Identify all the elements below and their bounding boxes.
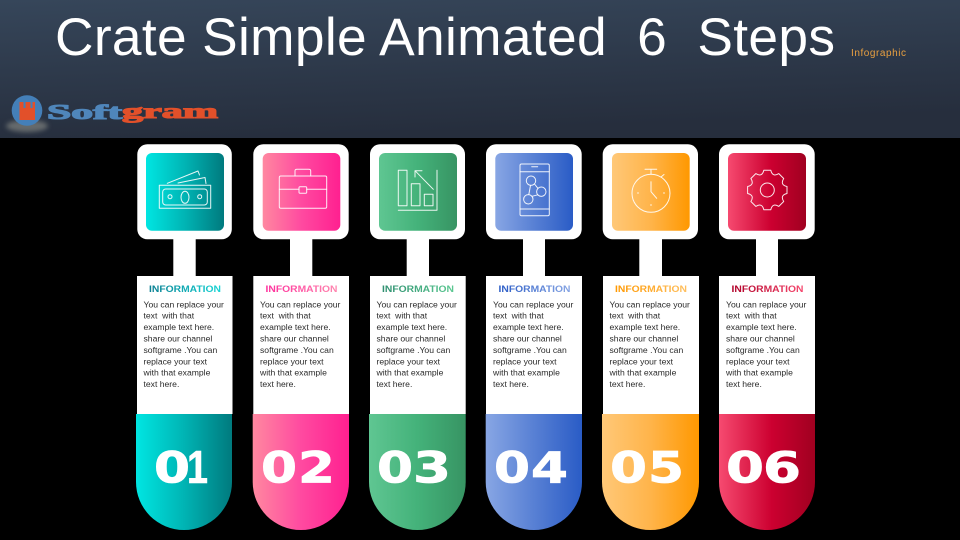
- step 6 panel: [719, 144, 815, 530]
- step 4 text body: replace your text: [493, 356, 557, 366]
- step 4 text body: with that example: [492, 368, 560, 378]
- step 2 text body: example text here.: [260, 322, 331, 332]
- step 5 text body: text with that: [610, 311, 661, 321]
- step 6 text body: share our channel: [726, 334, 795, 344]
- step 6 text body: text here.: [726, 379, 762, 389]
- step 3 text body: replace your text: [376, 356, 441, 366]
- step 4 text body: share our channel: [493, 334, 562, 344]
- step 2 text body: You can replace your: [260, 299, 341, 309]
- step 1 text body: share our channel: [144, 334, 212, 344]
- step 5 text body: You can replace your: [610, 299, 690, 309]
- step 3 text body: with that example: [376, 368, 444, 378]
- step 2 text body: with that example: [259, 368, 327, 378]
- step 2 text body: share our channel: [260, 334, 329, 344]
- icon: briefcase: [263, 153, 340, 231]
- step 1 text body: [137, 276, 232, 414]
- icon: stopwatch: [612, 153, 690, 231]
- icon: gear: [728, 153, 806, 231]
- step 2 number cap: [253, 414, 349, 530]
- logo: Softgram: Soft: [47, 100, 122, 124]
- step 3 number cap: 0: [377, 444, 413, 494]
- step 2 text body: softgrame .You can: [260, 345, 334, 355]
- step 6 text body: INFORMATION: [732, 284, 804, 294]
- step 4 text body: softgrame .You can: [493, 345, 567, 355]
- step 3 icon card: [370, 144, 465, 239]
- icon: banknotes: [146, 153, 224, 231]
- step 3 panel: [369, 144, 466, 530]
- step 3 text body: text with that: [376, 311, 428, 321]
- step 2 text body: replace your text: [260, 356, 324, 366]
- step 5 number cap: 5: [648, 444, 684, 494]
- step 6 text body: softgrame .You can: [726, 345, 800, 355]
- step 5 text body: INFORMATION: [615, 284, 687, 294]
- step 5 number cap: 0: [610, 444, 647, 494]
- step 6 text body: You can replace your: [726, 299, 807, 309]
- step 3 text body: You can replace your: [376, 299, 457, 309]
- step 5 number cap: [602, 414, 699, 530]
- step 4 text body: [486, 276, 582, 414]
- step 4 number cap: [486, 414, 582, 530]
- step 1 connector: [173, 239, 196, 277]
- step 1 text body: INFORMATION: [149, 284, 221, 294]
- header band: [0, 0, 960, 138]
- step 4 text body: text with that: [493, 311, 544, 321]
- step 1 number cap: 1: [187, 441, 208, 493]
- step 6 number cap: 0: [726, 444, 764, 494]
- logo: Softgram: [6, 95, 219, 132]
- step 6 text body: example text here.: [726, 322, 797, 332]
- step 5 text body: [603, 276, 699, 414]
- step 3 connector: [407, 239, 429, 277]
- step 2 number cap: 0: [261, 444, 297, 494]
- step 6 connector: [756, 239, 778, 277]
- step 2 text body: text here.: [260, 379, 296, 389]
- step 3 text body: text here.: [376, 379, 412, 389]
- step 4 panel: [486, 144, 582, 530]
- subtitle: Infographic: Infographic: [851, 48, 906, 59]
- step 1 text body: replace your text: [144, 356, 208, 366]
- step 3 text body: example text here.: [376, 322, 447, 332]
- step 1 number cap: [136, 414, 232, 530]
- step 4 text body: example text here.: [493, 322, 564, 332]
- step 1 text body: example text here.: [144, 322, 214, 332]
- step 6 text body: with that example: [725, 368, 793, 378]
- step 4 text body: You can replace your: [493, 299, 574, 309]
- step 5 text body: example text here.: [610, 322, 680, 332]
- step 2 icon card: [253, 144, 349, 239]
- logo: Softgram: gram: [122, 99, 219, 123]
- step 1 icon card: [137, 144, 232, 239]
- step 5 panel: [602, 144, 699, 530]
- step 3 text body: share our channel: [376, 334, 445, 344]
- step 4 text body: text here.: [493, 379, 529, 389]
- step 6 number cap: 6: [763, 444, 801, 494]
- step 1 number cap: 0: [154, 444, 190, 494]
- step 6 text body: text with that: [726, 311, 777, 321]
- step 3 text body: softgrame .You can: [376, 345, 450, 355]
- step 5 text body: share our channel: [610, 334, 678, 344]
- step 3 text body: INFORMATION: [382, 284, 454, 294]
- step 4 number cap: 0: [494, 444, 530, 494]
- step 4 text body: INFORMATION: [498, 284, 570, 294]
- step 2 text body: text with that: [260, 311, 311, 321]
- step 6 number cap: [719, 414, 815, 530]
- step 5 text body: text here.: [610, 379, 645, 389]
- step 3 number cap: 3: [413, 444, 451, 494]
- step 2 panel: [253, 144, 349, 530]
- step 1 text body: You can replace your: [144, 299, 224, 309]
- step 4 number cap: 4: [531, 444, 568, 494]
- step 5 text body: replace your text: [610, 356, 674, 366]
- step 3 number cap: [369, 414, 466, 530]
- step 4 connector: [523, 239, 545, 277]
- title: Crate Simple Animated 6 Steps: [55, 8, 835, 67]
- step 2 connector: [290, 239, 312, 277]
- icon: bar chart with arrow: [379, 153, 457, 231]
- step 5 text body: with that example: [608, 368, 677, 378]
- step 3 text body: [370, 276, 466, 414]
- step 2 number cap: 2: [298, 444, 335, 494]
- step 6 text body: replace your text: [726, 356, 790, 366]
- step 5 connector: [639, 239, 662, 277]
- step 6 icon card: [719, 144, 815, 239]
- step 5 icon card: [603, 144, 698, 239]
- step 1 text body: text here.: [144, 379, 179, 389]
- step 5 text body: softgrame .You can: [610, 345, 683, 355]
- step 1 panel: [136, 144, 232, 530]
- step 4 icon card: [486, 144, 582, 239]
- step 2 text body: INFORMATION: [266, 284, 338, 294]
- step 1 text body: softgrame .You can: [144, 345, 217, 355]
- step 1 text body: text with that: [144, 311, 195, 321]
- step 2 text body: [253, 276, 349, 414]
- step 6 text body: [719, 276, 815, 414]
- icon: phone with network: [495, 153, 573, 231]
- step 1 text body: with that example: [142, 368, 211, 378]
